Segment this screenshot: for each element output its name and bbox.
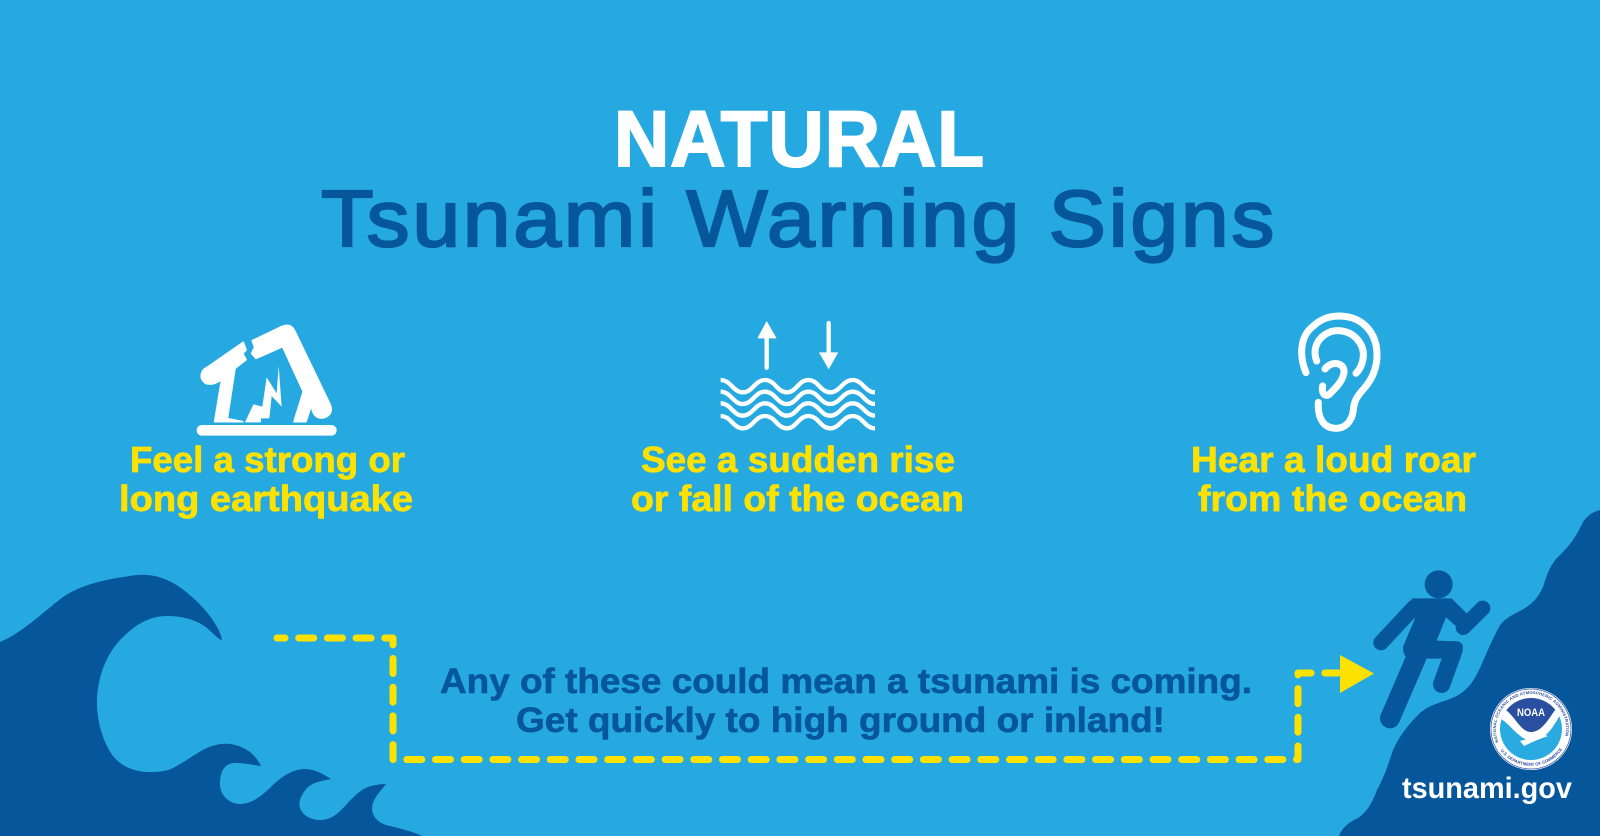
callout: message: Get quickly to high ground or inland! <box>516 701 1165 740</box>
label: sudden rise or fall: or fall of the ocean <box>631 478 964 519</box>
icon: ear <box>1302 316 1377 428</box>
title line: NATURAL: NATURAL <box>614 94 985 183</box>
dashed evacuation route <box>277 638 1338 760</box>
title line: Tsunami Warning Signs: Tsunami Warning Signs <box>321 174 1277 263</box>
icon: NOAA seal <box>1490 688 1572 770</box>
seal wordmark: NOAA <box>1517 707 1545 719</box>
illustration: breaking wave <box>0 575 422 836</box>
label: hear a loud roar: Hear a loud roar <box>1191 439 1476 480</box>
seal lower ring text: U.S. DEPARTMENT OF COMMERCE <box>1501 748 1562 766</box>
icon: running person <box>1381 570 1483 718</box>
label: sudden rise or fall: See a sudden rise <box>641 439 955 480</box>
label: hear a loud roar: from the ocean <box>1198 478 1467 519</box>
illustration: hillside <box>1339 510 1600 836</box>
label: feel a strong earthquake: long earthquake <box>119 478 413 519</box>
label: feel a strong earthquake <box>119 439 413 519</box>
website link: tsunami.gov <box>1402 772 1572 805</box>
label: feel a strong earthquake: Feel a strong or <box>130 439 405 480</box>
label: sudden rise or fall <box>631 439 964 519</box>
icon: collapsing house <box>197 325 337 436</box>
icon: arrows over waves <box>721 321 875 428</box>
callout: message: Any of these could mean a tsunami is coming. <box>440 662 1252 701</box>
panel: roar sign <box>1191 316 1476 519</box>
seal ring text: NATIONAL OCEANIC AND ATMOSPHERIC ADMINISTRATION <box>1493 691 1569 743</box>
panel: earthquake sign <box>119 325 413 519</box>
label: hear a loud roar <box>1191 439 1476 519</box>
callout: message <box>440 662 1252 740</box>
arrow head <box>1340 655 1374 693</box>
title <box>321 94 1277 263</box>
panel: ocean sign <box>631 321 964 519</box>
